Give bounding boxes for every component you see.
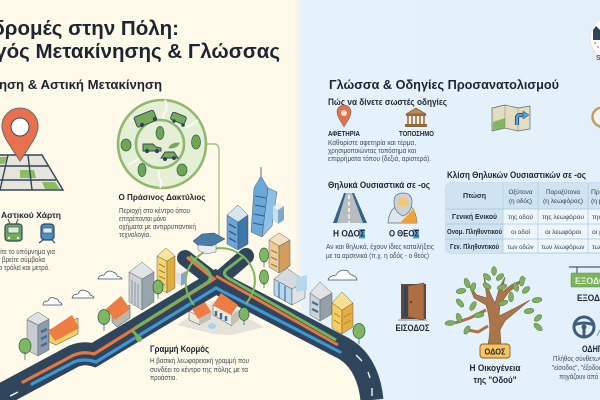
- small block: [176, 267, 186, 286]
- declension table: (η λεωφόρος): [543, 197, 583, 205]
- icon: family tree: [445, 266, 543, 358]
- labels: start and landmark: ΑΦΕΤΗΡΙΑ: [328, 129, 360, 138]
- declension table: Γενική Ενικού: [452, 214, 497, 221]
- heading: route line: Γραμμή Κορμός: [150, 344, 209, 355]
- text: green ring: οχήματα με αντιρρυπαντική: [119, 224, 196, 231]
- car top right: [170, 112, 187, 127]
- glass skyscraper: [251, 167, 277, 237]
- declension table: Γεν. Πληθυντικού: [450, 243, 499, 251]
- badge: logo: [590, 16, 600, 62]
- icon: exit sign: [569, 267, 600, 287]
- icon: landmark temple: [405, 108, 427, 127]
- icon: folded map: [492, 105, 530, 131]
- labels: start and landmark: [328, 129, 434, 138]
- declension table: οι οδοί: [511, 228, 530, 236]
- icon: door: [398, 283, 427, 320]
- heading: green ring: Ο Πράσινος Δακτύλιος: [118, 192, 206, 202]
- icon: map with pin: [0, 108, 63, 190]
- text: route line: [150, 358, 249, 382]
- icon: road: [333, 193, 367, 223]
- text: green ring: τεχνολογία.: [119, 231, 151, 239]
- text: route line: προάστια.: [150, 374, 177, 382]
- glass block: [274, 268, 305, 305]
- yellow tower: [157, 248, 175, 293]
- heading: right section: Γλώσσα & Οδηγίες Προσανατολισμού: [329, 77, 559, 92]
- yellow house: [48, 315, 79, 345]
- label: family of the road: [470, 363, 521, 386]
- text: compound words: [552, 355, 600, 381]
- car centre right: [161, 152, 178, 161]
- connector line: [207, 144, 219, 236]
- text: directions: [328, 139, 431, 163]
- text: directions: Καθορίστε αφετηρία και τέρμα,: [328, 139, 416, 147]
- heading: feminine nouns: Θηλυκά Ουσιαστικά σε -ος: [328, 179, 430, 190]
- blue house: [193, 233, 225, 254]
- grey office block: [27, 312, 49, 356]
- declension table: της λεωφόρου: [542, 213, 584, 221]
- declension table: οι λεωφόροι: [545, 228, 581, 236]
- icon: steering wheel: [574, 317, 600, 337]
- blue tower: [227, 205, 248, 250]
- declension table: Ονομ. Πληθυντικού: [447, 228, 502, 236]
- text: route line: Η βασική λεωφορειακή γραμμή που: [150, 358, 249, 365]
- icon: start pin: [337, 105, 351, 127]
- trees: [19, 248, 365, 360]
- van centre: [143, 144, 161, 153]
- label: the god: Ο ΘΕΟΣ: [389, 228, 420, 238]
- city map road: [0, 248, 372, 400]
- labels: start and landmark: ΤΟΠΟΣΗΜΟ: [399, 129, 434, 138]
- label: the road: Η ΟΔΟΣ: [333, 228, 366, 238]
- right buildings: [296, 275, 353, 334]
- route lines: [23, 258, 214, 382]
- icon: god figure: [388, 193, 417, 223]
- title: [0, 17, 280, 63]
- small blue block: [273, 203, 284, 224]
- central houses: [189, 293, 239, 329]
- text: map legend: [0, 248, 55, 272]
- icon: green ring zone: [118, 100, 206, 188]
- declension table: Οξύτονα: [508, 188, 533, 196]
- text: green ring: επιτρέπονται μόνο: [119, 215, 166, 223]
- declension table: Πτώση: [463, 193, 486, 200]
- plaza under houses: [177, 300, 264, 335]
- declension table: των οδών: [508, 243, 534, 251]
- trees in the ring: [121, 126, 200, 176]
- label: family of the road: Η Οικογένεια: [470, 363, 521, 374]
- orange roof house: [106, 296, 130, 327]
- label: entrance: ΕΙΣΟΔΟΣ: [396, 323, 430, 333]
- declension table: της οδού: [508, 213, 533, 221]
- tan tower: [269, 233, 290, 273]
- text: feminine nouns note: [326, 243, 435, 260]
- icon: metro: [39, 224, 55, 243]
- text: green ring: Περιοχή στο κέντρο όπου: [119, 207, 190, 215]
- text: feminine nouns note: Αν και θηλυκά, έχουν ίδιες καταλήξεις: [326, 243, 435, 251]
- text: directions: χρησιμοποιώντας τοπόσημα και: [328, 147, 416, 155]
- label: family of the road: της "Οδού": [474, 375, 516, 386]
- subheading: directions: Πώς να δίνετε σωστές οδηγίες: [328, 97, 447, 108]
- text: feminine nouns note: με τα αρσενικά (π.χ. η οδός - ο θεός): [326, 252, 429, 260]
- grey tower: [129, 262, 154, 310]
- icon: family tree: ΟΔΟΣ: [484, 346, 506, 356]
- icon: trolley: [5, 219, 22, 241]
- text: directions: επιρρήματα τόπου (δεξιά, αριστερά).: [328, 155, 431, 163]
- declension table: (η οδός): [509, 197, 532, 205]
- declension table: Παροξύτονα: [546, 188, 580, 196]
- van top left: [134, 110, 157, 128]
- icon: gold pin: [592, 108, 600, 131]
- text: green ring: [119, 207, 196, 239]
- clouds: [43, 270, 357, 305]
- text: route line: συνδέει το κέντρο της πόλης με τα: [150, 366, 248, 374]
- declension table: των λεωφόρων: [542, 243, 585, 251]
- declension table: [446, 183, 600, 253]
